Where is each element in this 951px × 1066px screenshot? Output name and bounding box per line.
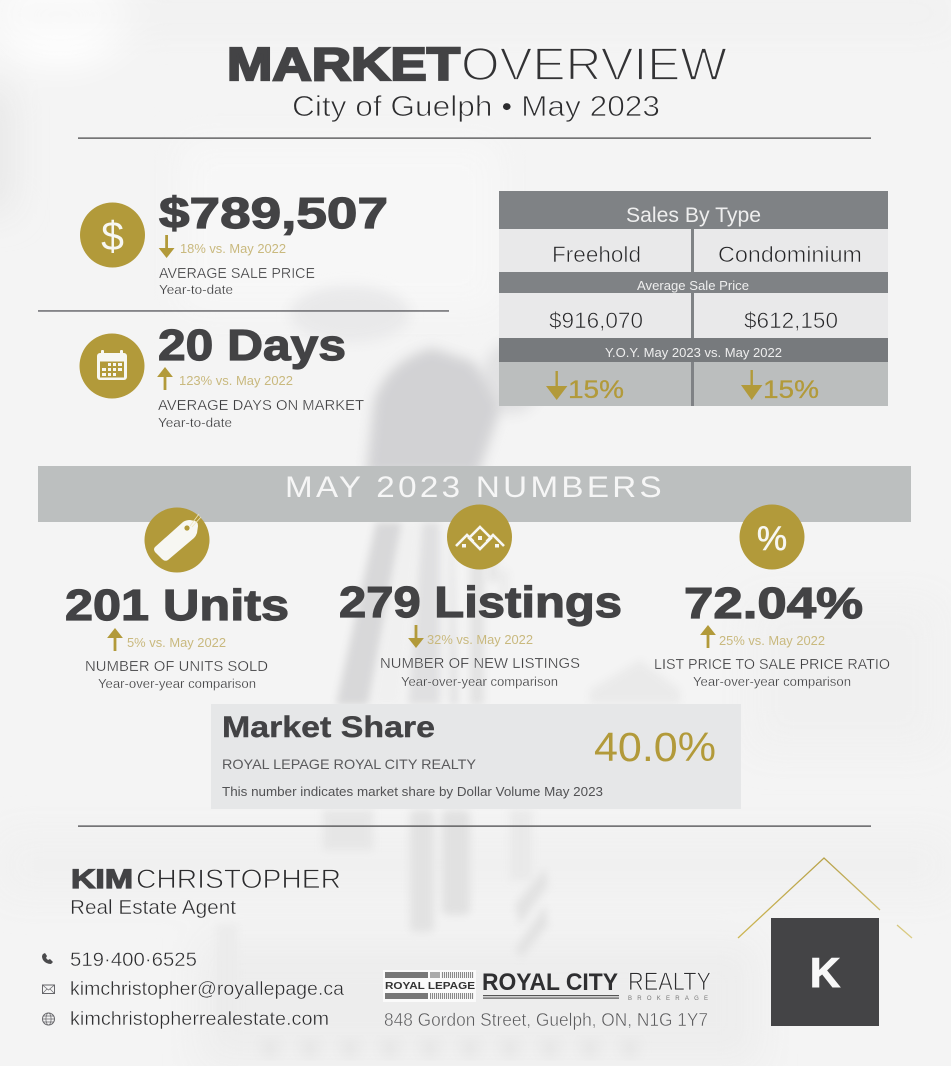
arrow: up — [157, 367, 173, 390]
contact: website: kimchristopherrealestate.com — [70, 1009, 329, 1030]
change text: 25% vs. May 2022 — [719, 633, 825, 648]
icon: dollar — [80, 202, 145, 268]
panel: new listings — [339, 504, 622, 689]
panel: units sold — [65, 508, 289, 691]
agent name: CHRISTOPHER — [136, 864, 341, 894]
icon: percent — [740, 504, 804, 570]
change text: 5% vs. May 2022 — [127, 635, 226, 650]
top divider — [78, 138, 871, 139]
value: freehold price: $916,070 — [549, 308, 643, 333]
arrow: down — [159, 235, 174, 258]
title: OVERVIEW — [461, 38, 728, 90]
logo: royal city realty — [482, 968, 711, 1002]
section divider — [38, 310, 449, 312]
change text: 123% vs. May 2022 — [179, 373, 293, 388]
icon: percent: % — [757, 520, 787, 558]
icon: price tag — [144, 508, 210, 572]
label: NUMBER OF NEW LISTINGS — [380, 655, 580, 672]
label: AVERAGE DAYS ON MARKET — [158, 397, 364, 414]
sublabel: Year-over-year comparison — [401, 674, 558, 689]
label: LIST PRICE TO SALE PRICE RATIO — [654, 656, 890, 673]
dark square — [771, 918, 879, 1026]
title: MARKET — [227, 38, 460, 90]
brokerage address: 848 Gordon Street, Guelph, ON, N1G 1Y7 — [384, 1010, 708, 1030]
logo: royal city realty: BROKERAGE — [628, 996, 708, 1002]
banner: may 2023 numbers: MAY 2023 NUMBERS — [285, 471, 665, 504]
logo: royal lepage: ROYAL LEPAGE — [385, 980, 475, 992]
agent name: KIM — [71, 864, 133, 894]
big number: days: 20 Days — [158, 321, 346, 370]
letter k: K — [810, 949, 840, 996]
icon: calendar — [80, 334, 144, 398]
value: condominium change — [741, 370, 819, 404]
brokerage name: ROYAL LEPAGE ROYAL CITY REALTY — [222, 756, 477, 772]
logo: royal city realty: ROYAL CITY — [482, 969, 618, 996]
panel: days on market — [80, 321, 364, 430]
sublabel: Year-over-year comparison — [98, 676, 256, 691]
row label: year over year: Y.O.Y. May 2023 vs. May 2022 — [605, 345, 782, 360]
column: freehold: Freehold — [552, 242, 641, 267]
big number: units: 201 Units — [65, 581, 289, 630]
value: condominium price: $612,150 — [744, 308, 838, 333]
panel: market share — [211, 704, 741, 809]
value: market share: 40.0% — [594, 724, 716, 770]
big number: sale price: $789,507 — [159, 189, 388, 238]
change text: 18% vs. May 2022 — [180, 241, 286, 256]
arrow: up — [107, 628, 123, 651]
heading: market share: Market Share — [222, 711, 435, 744]
icon: dollar: $ — [101, 213, 124, 259]
sublabel: Year-to-date — [158, 415, 232, 430]
logo: royal lepage — [383, 970, 476, 1002]
logo: royal city realty: REALTY — [628, 968, 711, 996]
label: NUMBER OF UNITS SOLD — [85, 658, 268, 675]
logo: agent house mark — [738, 858, 912, 1026]
value: condominium change: 15% — [763, 376, 819, 404]
agent title: Real Estate Agent — [70, 897, 236, 919]
explanatory note: This number indicates market share by Dollar Volume May 2023 — [222, 785, 603, 799]
contact: email: kimchristopher@royallepage.ca — [70, 979, 344, 1000]
value: freehold change — [546, 371, 624, 404]
arrow: up — [700, 625, 716, 648]
title — [227, 38, 728, 90]
contact: phone: 519·400·6525 — [70, 950, 197, 971]
panel: sale price ratio — [654, 504, 890, 689]
gold roof — [738, 858, 912, 938]
big number: listings: 279 Listings — [339, 578, 622, 627]
table heading: Sales By Type — [626, 204, 761, 227]
value: freehold change: 15% — [568, 376, 624, 404]
label: AVERAGE SALE PRICE — [159, 265, 315, 282]
panel: sales by type table — [499, 191, 888, 406]
icon: houses — [447, 504, 512, 570]
banner: may 2023 numbers — [38, 466, 911, 522]
subtitle: City of Guelph • May 2023 — [292, 91, 660, 123]
footer divider — [78, 826, 871, 827]
panel: average sale price — [80, 189, 388, 297]
arrow: down — [408, 625, 424, 648]
big number: ratio: 72.04% — [684, 579, 863, 628]
column: condominium: Condominium — [718, 242, 862, 267]
sublabel: Year-to-date — [159, 282, 233, 297]
change text: 32% vs. May 2022 — [427, 632, 533, 647]
sublabel: Year-over-year comparison — [693, 674, 851, 689]
row label: average sale price: Average Sale Price — [637, 279, 749, 293]
